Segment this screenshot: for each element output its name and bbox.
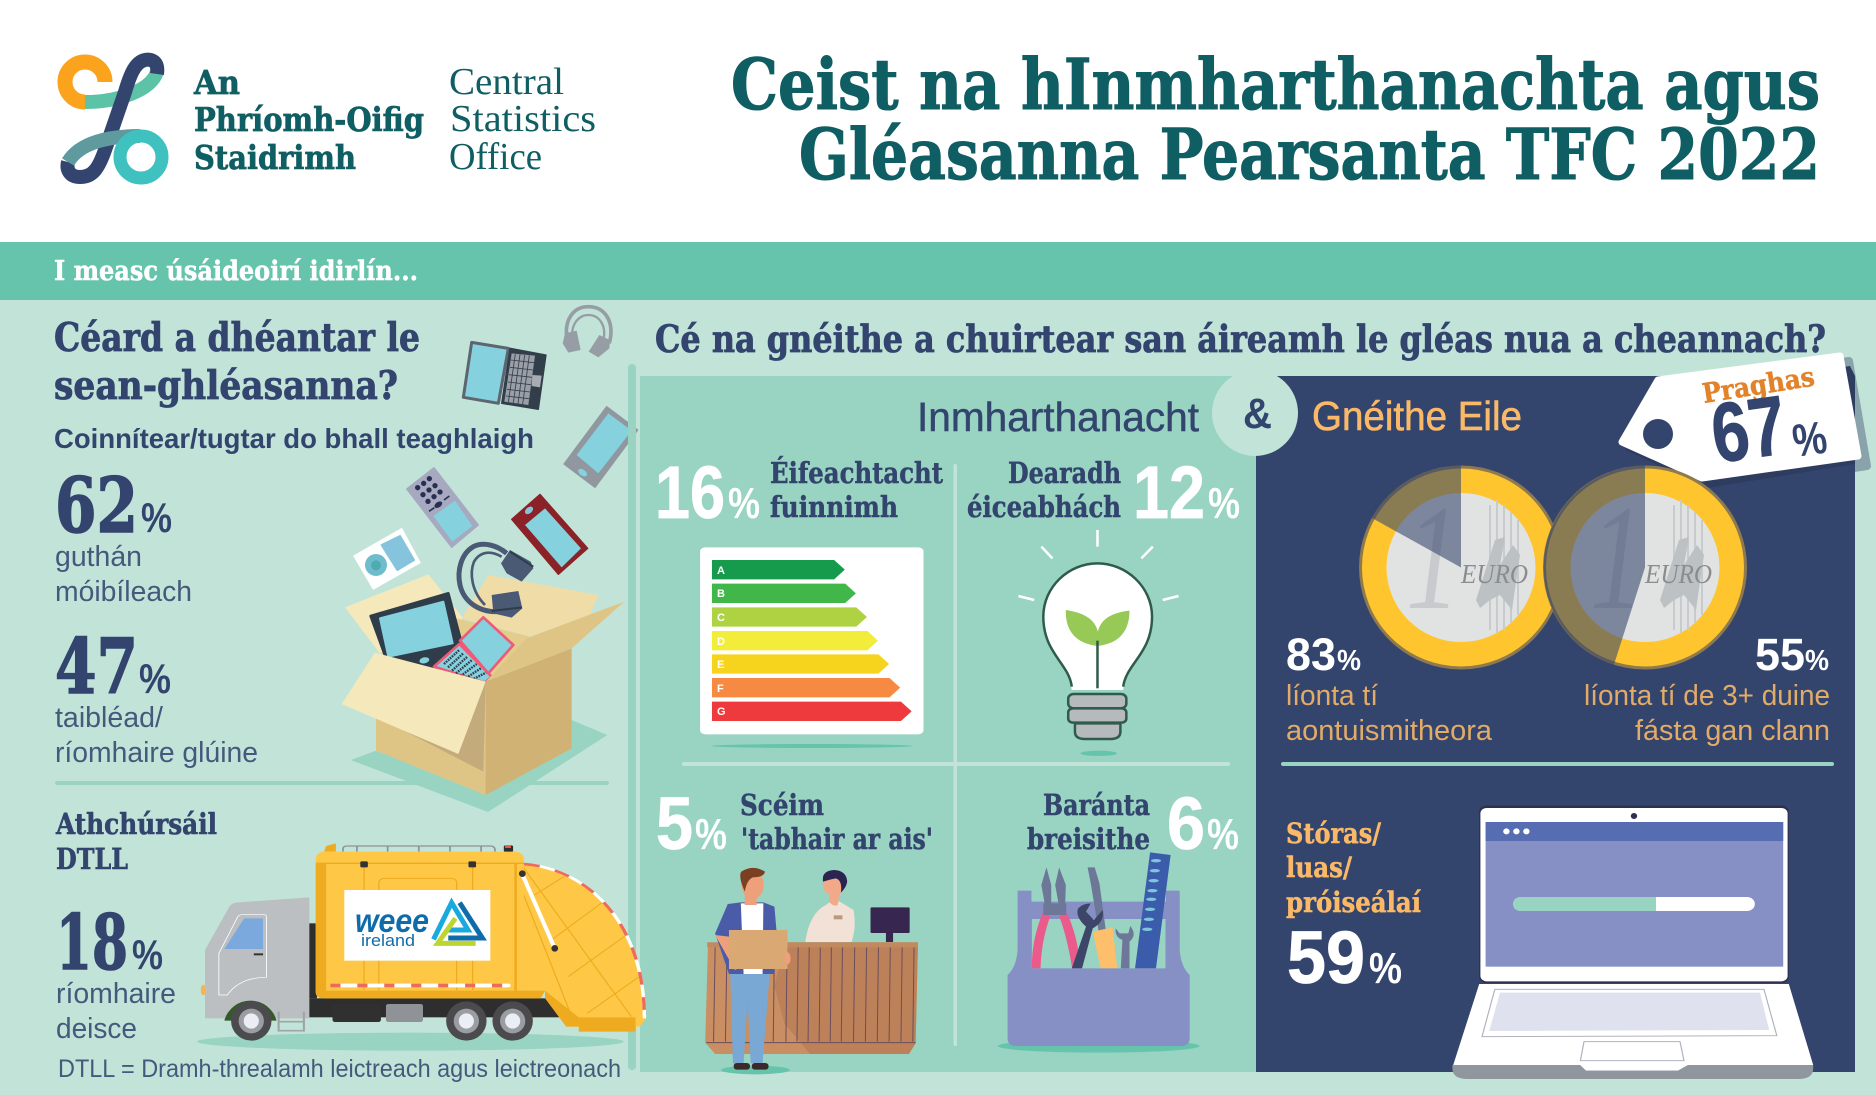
pink laptop [434, 617, 513, 683]
rating letters: B [717, 588, 725, 600]
stat: 6% extended warranty: breisithe [1027, 822, 1150, 856]
music player [354, 529, 420, 589]
cab [205, 897, 309, 1018]
stat: 5% take-back scheme: 5 [656, 782, 693, 865]
logo text: English name: Central [449, 61, 564, 103]
stat: 12% eco design [967, 451, 1240, 534]
price tag shadow outside panel [1627, 361, 1867, 490]
spanner large [1072, 903, 1103, 968]
stat: 5% take-back scheme [656, 782, 933, 865]
heading: recycling of WEEE: DTLL [56, 842, 128, 876]
price tag: 67%: 67 [1705, 377, 1792, 481]
shop assistant [805, 870, 855, 942]
monitor [871, 907, 910, 942]
chart: coin 55% adult households: EURO [1644, 559, 1712, 589]
logo text: English name: Office [449, 136, 542, 178]
ruler [1135, 852, 1171, 968]
stat: 47% tablet or laptop: taibléad/ [55, 702, 164, 734]
stat: 12% eco design: éiceabhách [967, 490, 1121, 524]
remote phone [407, 468, 478, 547]
price tag: 67%: Praghas [1700, 362, 1817, 410]
phone grey [564, 407, 638, 487]
chart: coin 83% single parent households [1360, 466, 1562, 668]
body [316, 852, 545, 998]
stat: 12% eco design: Dearadh [1008, 456, 1121, 490]
chart: coin 83% single parent households: 1 [1406, 475, 1460, 641]
stat: 18% desktop computer: deisce [56, 1013, 137, 1045]
heading: recycling of WEEE: Athchúrsáil [55, 807, 217, 841]
band: among internet users [0, 242, 1876, 300]
stat: 18% desktop computer: % [132, 931, 163, 978]
rating letters: C [717, 612, 725, 624]
stat: 83% [1286, 629, 1493, 747]
stat: 16% energy efficiency: % [728, 479, 760, 528]
stat: 62% mobile phone [55, 461, 192, 608]
rating letters: F [717, 683, 724, 695]
stat: 59% storage speed processor: Stóras/ [1286, 817, 1382, 850]
logo text: English name: Statistics [450, 98, 596, 140]
band: among internet users: I measc úsáideoirí idirlín... [54, 256, 418, 287]
stat: 6% extended warranty: % [1207, 810, 1239, 859]
counter [705, 942, 918, 1054]
stat: 62% mobile phone: % [141, 494, 172, 541]
ampersand badge [1212, 370, 1298, 456]
tablet dark [371, 593, 462, 673]
truck shadow [197, 1033, 624, 1051]
logo text: Irish name [193, 63, 424, 177]
ampersand badge: & [1243, 390, 1272, 438]
panel heading: sustainability: Inmharthanacht [917, 394, 1200, 440]
logo text: Irish name: An [193, 63, 240, 102]
illustration: customer at shop counter [705, 868, 918, 1074]
stat: 59% storage speed processor [1286, 817, 1421, 999]
stat: 47% tablet or laptop: % [139, 655, 171, 702]
price tag: 67%: % [1789, 411, 1830, 467]
illustration: recycling truck [197, 843, 646, 1051]
chart: coin 55% adult households: 1 [1590, 475, 1644, 641]
WEEE wordmark: weee [355, 902, 429, 939]
box shadow [351, 720, 607, 812]
stat: 5% take-back scheme: 'tabhair ar ais' [741, 822, 933, 856]
stat: 47% tablet or laptop: 47 [55, 622, 138, 711]
stat: 55% [1584, 629, 1830, 747]
stat: 62% mobile phone: 62 [55, 461, 138, 550]
back flaps [345, 574, 463, 653]
stat: 6% extended warranty: 6 [1167, 782, 1205, 865]
stat: 5% take-back scheme: Scéim [740, 788, 824, 822]
logo text: Irish name: Phríomh-Oifig [194, 100, 424, 139]
heading: recycling of WEEE [55, 807, 217, 876]
stat: 59% storage speed processor: luas/ [1286, 851, 1353, 884]
stat: 83%: % [1337, 645, 1361, 677]
illustration: laptop with progress bar [1452, 806, 1813, 1079]
headset dark [459, 544, 533, 618]
WEEE panel [344, 890, 490, 961]
laptop flat [463, 342, 546, 409]
tail [513, 863, 646, 1027]
box faces [376, 682, 486, 795]
spanner small [1116, 926, 1134, 968]
customer [715, 868, 791, 1070]
rating letters: D [717, 636, 725, 648]
progress bar [1513, 897, 1755, 911]
grid dividers [682, 464, 1230, 1046]
icon: light bulb with leaves [1018, 530, 1179, 756]
footnote: DTLL = Dramh-threalamh leictreach agus leictreonach [58, 1055, 621, 1083]
illustration: box of old devices [342, 307, 638, 812]
stat: 18% desktop computer [56, 898, 176, 1045]
stat: 16% energy efficiency: 16 [655, 451, 725, 534]
heading: what is done with old devices [54, 315, 420, 409]
WEEE wordmark: ireland [361, 931, 415, 950]
subheading: kept or given to household member: Coinnítear/tugtar do bhall teaghlaigh [54, 423, 534, 454]
stat: 55%: 55 [1755, 629, 1805, 680]
title [731, 43, 1820, 196]
divider left [628, 364, 636, 1070]
panel heading: other features: Gnéithe Eile [1312, 393, 1522, 439]
illustration: toolbox [998, 852, 1199, 1053]
chart: coin 55% adult households [1544, 466, 1746, 668]
rating letters: A [717, 565, 725, 577]
rating letters [717, 565, 726, 718]
chassis [309, 998, 560, 1017]
stat: 6% extended warranty [1027, 782, 1239, 865]
wheels [231, 1001, 533, 1041]
panel: sustainability [640, 376, 1256, 1072]
stat: 59% storage speed processor: próiseálaí [1286, 886, 1421, 919]
stat: 47% tablet or laptop: ríomhaire glúine [55, 737, 258, 769]
stat: 83%: líonta tí [1286, 680, 1378, 712]
pliers [1032, 867, 1078, 968]
logo text: Irish name: Staidrimh [194, 138, 356, 177]
rating letters: G [717, 706, 726, 718]
stat: 6% extended warranty: Baránta [1043, 788, 1150, 822]
box inside [380, 618, 530, 682]
stat: 55%: líonta tí de 3+ duine [1584, 680, 1830, 712]
icon: energy rating label [700, 547, 924, 748]
stat: 59% storage speed processor: % [1369, 944, 1402, 993]
headphones grey [563, 307, 611, 357]
stat: 18% desktop computer: ríomhaire [56, 978, 176, 1010]
stat: 12% eco design: % [1208, 479, 1240, 528]
stat: 83%: aontuismitheora [1286, 715, 1493, 747]
logo text: English name [449, 61, 596, 178]
stat: 62% mobile phone: guthán [55, 541, 142, 573]
WEEE triangle [434, 903, 482, 943]
stat: 5% take-back scheme: % [695, 810, 727, 859]
panel: other features [1256, 376, 1855, 1072]
screwdriver [1088, 867, 1117, 968]
stat: 16% energy efficiency: Éifeachtacht [770, 455, 944, 490]
chart: coin 83% single parent households: EURO [1460, 559, 1528, 589]
price tag: 67% [1622, 356, 1858, 488]
stat: 16% energy efficiency [655, 451, 944, 534]
heading: what is done with old devices: Céard a dhéantar le [54, 315, 420, 361]
rating letters: E [717, 659, 724, 671]
red phone [512, 494, 588, 574]
stat: 16% energy efficiency: fuinnimh [770, 490, 898, 524]
stat: 47% tablet or laptop [55, 622, 258, 769]
stat: 55%: % [1805, 645, 1829, 677]
stat: 12% eco design: 12 [1133, 451, 1205, 534]
stat: 62% mobile phone: móibíleach [55, 576, 192, 608]
stat: 83%: 83 [1286, 629, 1336, 680]
stat: 18% desktop computer: 18 [56, 898, 128, 987]
heading: what is done with old devices: sean-ghléasanna? [54, 363, 398, 409]
logo: CSO mark [65, 60, 162, 178]
stat: 55%: fásta gan clann [1635, 715, 1830, 747]
stat: 59% storage speed processor: 59 [1287, 916, 1365, 999]
